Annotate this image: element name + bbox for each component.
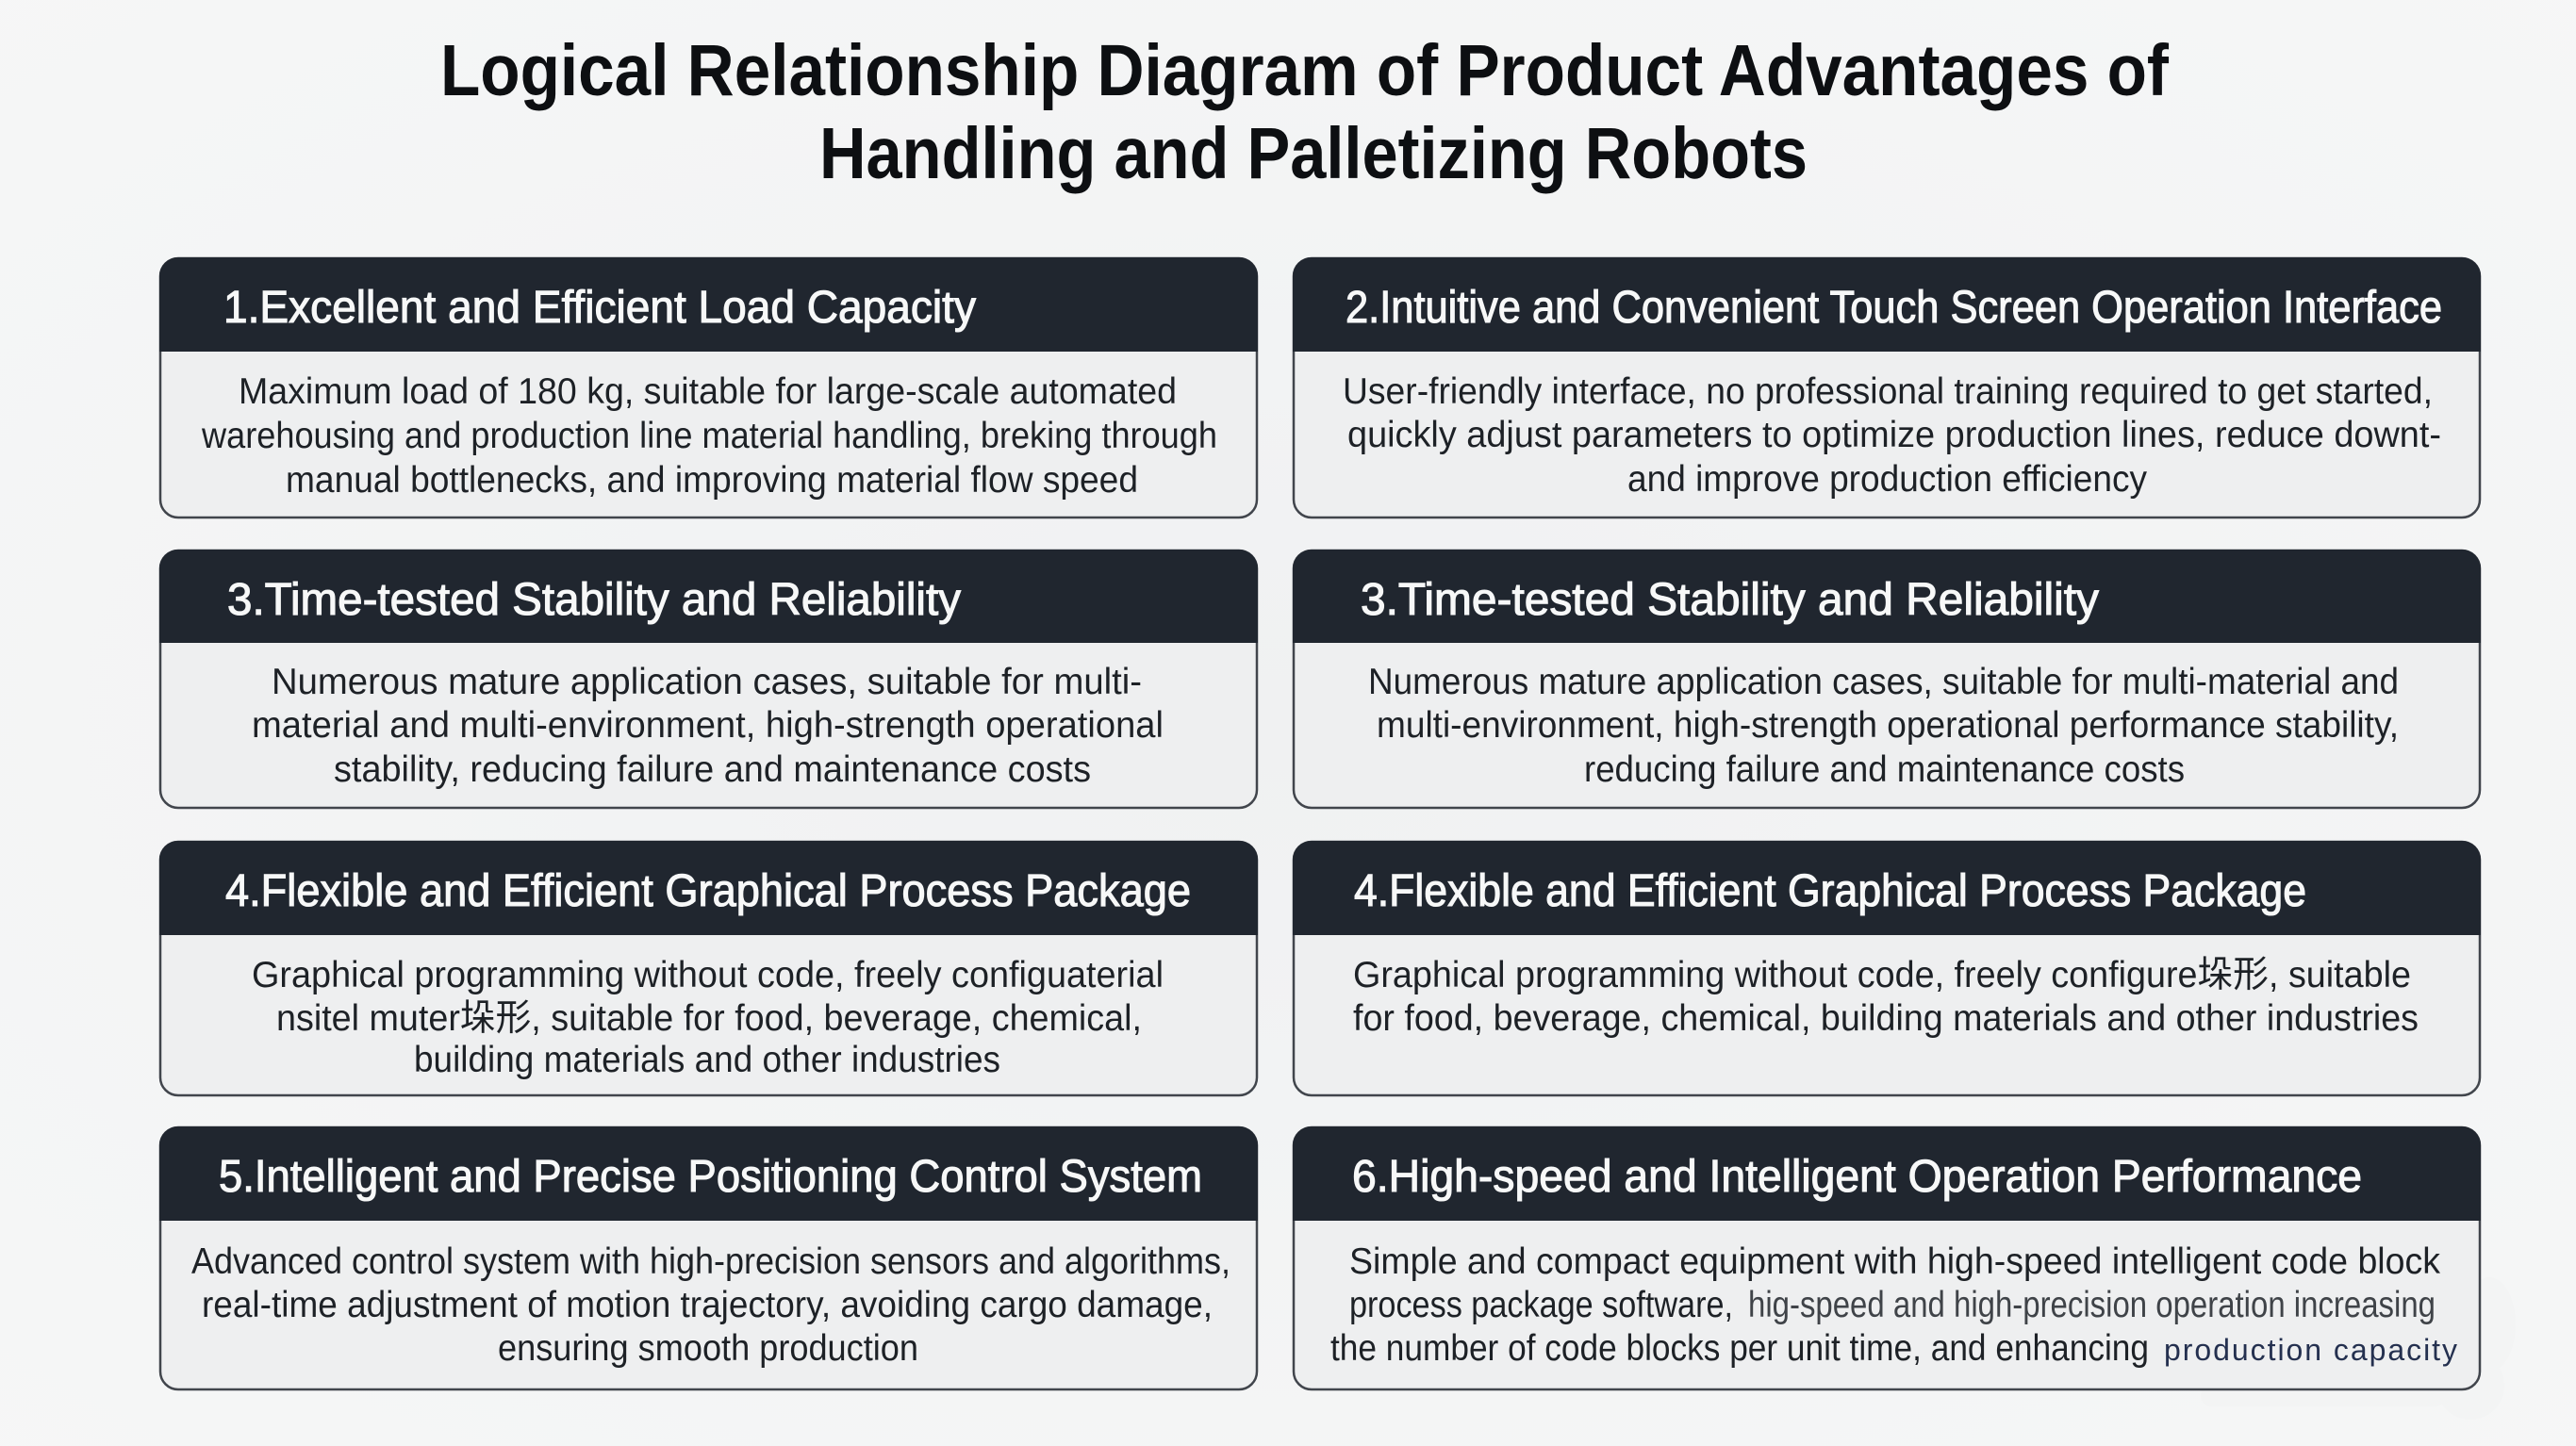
- title: [440, 30, 2169, 194]
- panel body text: ensuring smooth production: [498, 1328, 918, 1369]
- panel heading: [1293, 1126, 2481, 1221]
- panel body text: quickly adjust parameters to optimize production lines, reduce downt-: [1347, 415, 2441, 455]
- panel heading: 4.Flexible and Efficient Graphical Process Package: [225, 866, 1191, 916]
- panel body text: User-friendly interface, no professional training required to get started,: [1343, 371, 2433, 412]
- panel body text: process package software,: [1349, 1285, 1733, 1325]
- panel body text: and improve production efficiency: [1627, 459, 2147, 500]
- panel body text: Advanced control system with high-precision sensors and algorithms,: [191, 1241, 1230, 1282]
- panel body text: [201, 371, 1217, 501]
- panel body text: Numerous mature application cases, suitable for multi-material and: [1368, 662, 2399, 702]
- smudge: retouch marks behind bottom right panel: [2201, 1277, 2516, 1420]
- panel body text: Simple and compact equipment with high-speed intelligent code block: [1349, 1241, 2440, 1282]
- panel heading: 6.High-speed and Intelligent Operation Performance: [1352, 1152, 2362, 1202]
- panel body text: [1343, 371, 2441, 500]
- panel body text: production capacity: [2164, 1333, 2457, 1367]
- panel body text: Graphical programming without code, freely configuaterial: [252, 955, 1164, 995]
- panel: 2 touch screen: [1293, 257, 2481, 518]
- panel heading: 1.Excellent and Efficient Load Capacity: [223, 283, 976, 333]
- panel body text: material and multi-environment, high-strength operational: [252, 705, 1164, 746]
- panel: 6 high-speed performance: [1293, 1126, 2481, 1389]
- panel body text: [191, 1241, 1230, 1369]
- panel body text: for food, beverage, chemical, building materials and other industries: [1353, 998, 2419, 1039]
- panel heading: 4.Flexible and Efficient Graphical Process Package: [1354, 866, 2306, 916]
- panel: 4 process package left: [159, 841, 1258, 1095]
- panel body text: stability, reducing failure and maintenance costs: [334, 749, 1091, 790]
- panel body text: the number of code blocks per unit time, and enhancing: [1330, 1328, 2149, 1369]
- panel body text: [1353, 955, 2419, 1039]
- panel heading: 5.Intelligent and Precise Positioning Control System: [219, 1152, 1202, 1202]
- panel: 5 positioning control: [159, 1126, 1258, 1389]
- panel body text: multi-environment, high-strength operational performance stability,: [1377, 705, 2399, 746]
- panel body text: manual bottlenecks, and improving material flow speed: [286, 460, 1138, 501]
- panel heading: [159, 1126, 1258, 1221]
- title: Handling and Palletizing Robots: [819, 113, 1808, 194]
- panel heading: [159, 257, 1258, 352]
- panel heading: [1293, 841, 2481, 935]
- panel body text: [252, 662, 1164, 790]
- panel: 3 stability left: [159, 550, 1258, 808]
- panel body text: Numerous mature application cases, suitable for multi-: [272, 662, 1142, 702]
- panel heading: [1293, 257, 2481, 352]
- panel body text: hig-speed and high-precision operation increasing: [1748, 1285, 2436, 1325]
- panel body text: Graphical programming without code, freely configure垛形, suitable: [1353, 955, 2411, 995]
- panel heading: 3.Time-tested Stability and Reliability: [227, 575, 961, 625]
- panel heading: [159, 550, 1258, 643]
- panel: 4 process package right: [1293, 841, 2481, 1095]
- panel: 1 load capacity: [159, 257, 1258, 518]
- title: Logical Relationship Diagram of Product Advantages of: [440, 30, 2169, 111]
- panel heading: 3.Time-tested Stability and Reliability: [1361, 575, 2099, 625]
- panel body text: real-time adjustment of motion trajectory, avoiding cargo damage,: [202, 1285, 1213, 1325]
- panel body text: nsitel muter垛形, suitable for food, beverage, chemical,: [276, 998, 1142, 1039]
- panel body text: Maximum load of 180 kg, suitable for large-scale automated: [239, 371, 1177, 412]
- panel: 3 stability right: [1293, 550, 2481, 808]
- panel body text: building materials and other industries: [414, 1040, 1000, 1080]
- panel body text: warehousing and production line material handling, breking through: [201, 416, 1217, 456]
- panel body text: [1368, 662, 2399, 790]
- panel heading: [159, 841, 1258, 935]
- panel heading: [1293, 550, 2481, 643]
- panel body text: [252, 955, 1164, 1080]
- panel body text: [1330, 1241, 2457, 1369]
- panel heading: 2.Intuitive and Convenient Touch Screen Operation Interface: [1346, 283, 2442, 333]
- panel body text: reducing failure and maintenance costs: [1584, 749, 2185, 790]
